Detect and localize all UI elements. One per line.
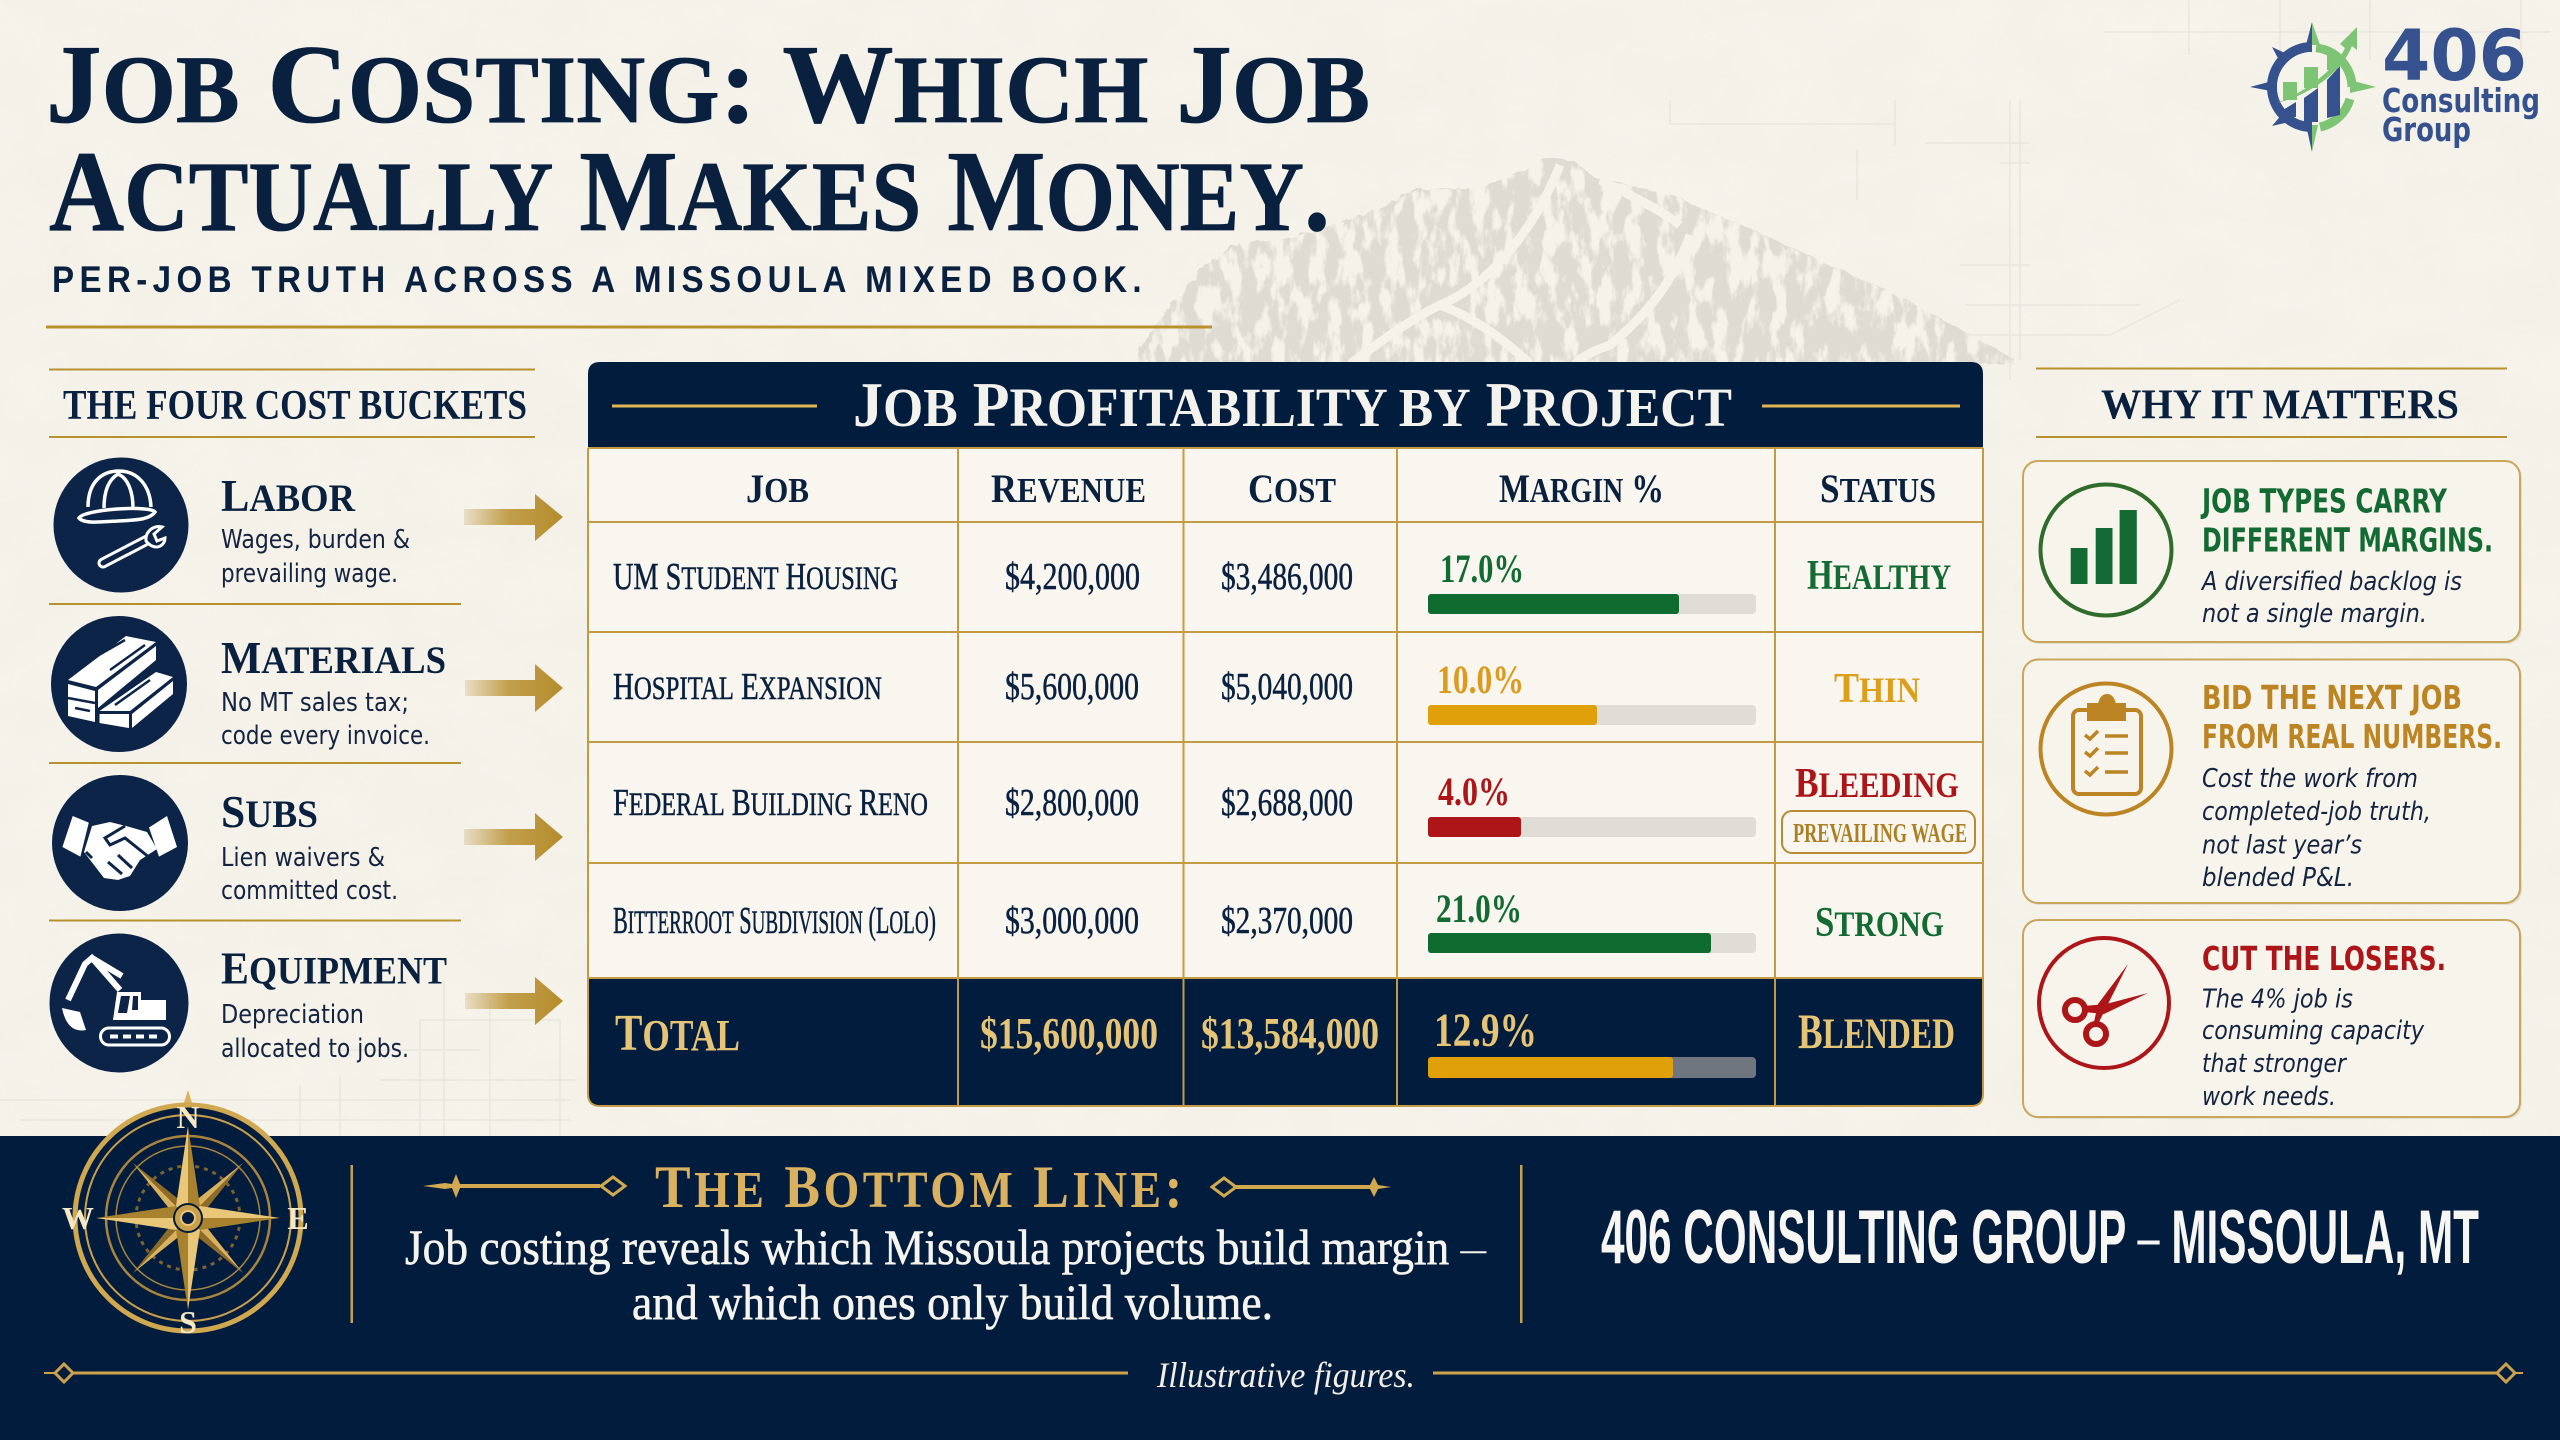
arrow: subs bbox=[464, 813, 563, 861]
icon: compass rose bbox=[62, 1090, 309, 1340]
row: Bitterroot Subdivision bbox=[613, 886, 1944, 953]
text: equipment: Depreciation bbox=[221, 1000, 364, 1030]
mountain watermark bbox=[1130, 158, 2020, 364]
row: Hospital Expansion: $5,040,000 bbox=[1221, 666, 1353, 708]
icon: compass rose: E bbox=[287, 1200, 309, 1236]
title: JOB COSTING: WHICH JOB bbox=[46, 23, 1370, 147]
row: Hospital Expansion: $5,600,000 bbox=[1005, 666, 1139, 708]
table header row: REVENUE bbox=[991, 466, 1146, 511]
table header row: STATUS bbox=[1820, 466, 1936, 511]
bottom band bbox=[0, 1090, 2560, 1440]
table header row: COST bbox=[1248, 466, 1336, 511]
blueprint lines bottom left bbox=[0, 980, 575, 1136]
footnote: Illustrative figures. bbox=[1156, 1355, 1415, 1395]
row: Federal Building Reno: BLEEDING bbox=[1795, 761, 1959, 807]
blueprint lines top right bbox=[1670, 0, 2550, 380]
logo compass mark bbox=[2250, 22, 2376, 152]
panel: job profitability table bbox=[588, 362, 1983, 1106]
prevailing wage tag bbox=[1782, 811, 1975, 853]
heading: why it matters bbox=[2036, 368, 2507, 438]
title rule bbox=[46, 326, 1212, 328]
row: total: BLENDED bbox=[1798, 1003, 1955, 1059]
table header row: JOB bbox=[746, 466, 809, 511]
row: Hospital Expansion: THIN bbox=[1834, 666, 1920, 712]
row: UM Student Housing: $4,200,000 bbox=[1005, 556, 1140, 598]
row: Bitterroot Subdivision: 21.0% bbox=[1436, 886, 1522, 931]
icon: hard hat and wrench bbox=[54, 458, 188, 592]
text: labor: LABOR bbox=[221, 470, 355, 521]
table title bar: JOB PROFITABILITY BY PROJECT bbox=[853, 369, 1732, 440]
heading: the bottom line: THE BOTTOM LINE: bbox=[655, 1154, 1186, 1220]
row: UM Student Housing: 17.0% bbox=[1440, 546, 1524, 591]
row: Hospital Expansion bbox=[613, 657, 1920, 725]
row: Federal Building Reno bbox=[613, 761, 1975, 853]
card: job types carry different margins: JOB TYPES CARRY bbox=[2201, 482, 2448, 521]
total row background bbox=[588, 978, 1983, 1106]
text: labor: prevailing wage. bbox=[221, 559, 398, 589]
card: bid the next job: blended P&L. bbox=[2202, 863, 2354, 893]
card: cut the losers: that stronger bbox=[2202, 1049, 2348, 1079]
logo wordmark: Group bbox=[2382, 110, 2471, 149]
icon: clipboard checklist bbox=[2040, 684, 2172, 814]
row: Bitterroot Subdivision: $2,370,000 bbox=[1221, 900, 1353, 942]
text: equipment bbox=[221, 942, 447, 1064]
text: materials: MATERIALS bbox=[221, 632, 446, 683]
heading: the four cost buckets bbox=[49, 368, 535, 438]
logo: 406 Consulting Group bbox=[2250, 15, 2540, 152]
text: subs bbox=[221, 786, 398, 906]
icon: bar chart bbox=[2040, 484, 2172, 616]
card: cut the losers: work needs. bbox=[2202, 1082, 2336, 1112]
brand line: — bbox=[2137, 1218, 2160, 1262]
row: Federal Building Reno: $2,800,000 bbox=[1005, 782, 1139, 824]
icon: excavator bbox=[50, 934, 188, 1072]
text: subs: committed cost. bbox=[221, 876, 398, 906]
row: Federal Building Reno: FEDERAL BUILDING RENO bbox=[613, 782, 928, 824]
text: equipment: EQUIPMENT bbox=[221, 942, 447, 994]
row: total: 12.9% bbox=[1434, 1004, 1537, 1057]
bottom line statement: Job costing reveals which Missoula projects build margin bbox=[405, 1219, 1555, 1275]
card: cut the losers: CUT THE LOSERS. bbox=[2202, 939, 2446, 978]
title bbox=[46, 23, 1370, 256]
arrow: equipment bbox=[465, 977, 563, 1025]
icon: lumber bbox=[51, 616, 187, 752]
row: UM Student Housing: HEALTHY bbox=[1807, 553, 1951, 599]
footer rule left bbox=[44, 1364, 1128, 1382]
table title bar bbox=[588, 362, 1983, 448]
card: job types carry different margins: A diversified backlog is bbox=[2200, 567, 2462, 597]
icon: compass rose: S bbox=[179, 1304, 197, 1340]
bottom line statement bbox=[405, 1219, 1487, 1330]
dividers bbox=[350, 1165, 1522, 1323]
arrow: labor bbox=[464, 494, 563, 541]
table header row: MARGIN % bbox=[1499, 466, 1664, 511]
row: total: TOTAL bbox=[615, 1005, 740, 1062]
icon: scissors bbox=[2039, 938, 2169, 1068]
arrow: materials bbox=[465, 664, 563, 712]
card: bid the next job: BID THE NEXT JOB bbox=[2202, 678, 2462, 717]
row: UM Student Housing: UM STUDENT HOUSING bbox=[613, 556, 898, 598]
card: job types carry different margins bbox=[2023, 461, 2522, 644]
row: Bitterroot Subdivision: STRONG bbox=[1815, 900, 1944, 946]
card: bid the next job: not last year’s bbox=[2202, 830, 2362, 860]
row: Bitterroot Subdivision: $3,000,000 bbox=[1005, 900, 1139, 942]
bottom line statement: — bbox=[1460, 1235, 1487, 1266]
row: Hospital Expansion: 10.0% bbox=[1437, 657, 1524, 702]
card: job types carry different margins: not a single margin. bbox=[2202, 599, 2427, 629]
text: labor bbox=[221, 470, 410, 589]
text: subs: Lien waivers & bbox=[221, 843, 385, 873]
row: total: $13,584,000 bbox=[1201, 1009, 1379, 1058]
footer rule right bbox=[1433, 1364, 2523, 1382]
card: cut the losers bbox=[2023, 920, 2522, 1119]
row: UM Student Housing: $3,486,000 bbox=[1221, 556, 1353, 598]
text: materials: No MT sales tax; bbox=[221, 688, 409, 718]
title: ACTUALLY MAKES MONEY. bbox=[49, 128, 1330, 256]
row: Federal Building Reno: $2,688,000 bbox=[1221, 782, 1353, 824]
card: bid the next job: Cost the work from bbox=[2202, 764, 2418, 794]
text: equipment: allocated to jobs. bbox=[221, 1034, 409, 1064]
row: Hospital Expansion: HOSPITAL EXPANSION bbox=[613, 666, 882, 708]
table header row bbox=[746, 466, 1936, 511]
text: materials bbox=[221, 632, 446, 751]
card: bid the next job bbox=[2023, 660, 2522, 905]
icon: compass rose: W bbox=[62, 1200, 94, 1236]
ornament right bbox=[1212, 1177, 1391, 1197]
panel: why it matters bbox=[2023, 368, 2522, 1119]
logo wordmark bbox=[2382, 15, 2540, 149]
card: cut the losers: The 4% job is bbox=[2202, 985, 2353, 1015]
heading: the four cost buckets: THE FOUR COST BUCKETS bbox=[63, 383, 527, 429]
panel: the four cost buckets bbox=[49, 368, 563, 1072]
row: Bitterroot Subdivision: BITTERROOT SUBDIVISION (LOLO) bbox=[613, 900, 936, 942]
icon: handshake bbox=[52, 775, 188, 911]
logo wordmark: 406 bbox=[2382, 15, 2527, 97]
text: materials: code every invoice. bbox=[221, 721, 430, 751]
heading: why it matters: WHY IT MATTERS bbox=[2101, 382, 2459, 428]
ornament left bbox=[423, 1174, 625, 1198]
icon: compass rose: N bbox=[176, 1099, 200, 1135]
subtitle: PER-JOB TRUTH ACROSS A MISSOULA MIXED BOOK. bbox=[52, 259, 1147, 300]
card: cut the losers: consuming capacity bbox=[2202, 1016, 2425, 1046]
row: total bbox=[615, 1003, 1955, 1078]
text: labor: Wages, burden & bbox=[221, 525, 410, 555]
row: total: $15,600,000 bbox=[980, 1009, 1158, 1058]
prevailing wage tag: PREVAILING WAGE bbox=[1793, 818, 1967, 848]
card: bid the next job: completed-job truth, bbox=[2202, 797, 2431, 827]
row: Federal Building Reno: 4.0% bbox=[1438, 769, 1510, 814]
bottom line statement: and which ones only build volume. bbox=[632, 1274, 1273, 1330]
brand line: 406 CONSULTING GROUP bbox=[1601, 1195, 2544, 1280]
row: UM Student Housing bbox=[613, 546, 1951, 614]
text: subs: SUBS bbox=[221, 786, 318, 837]
